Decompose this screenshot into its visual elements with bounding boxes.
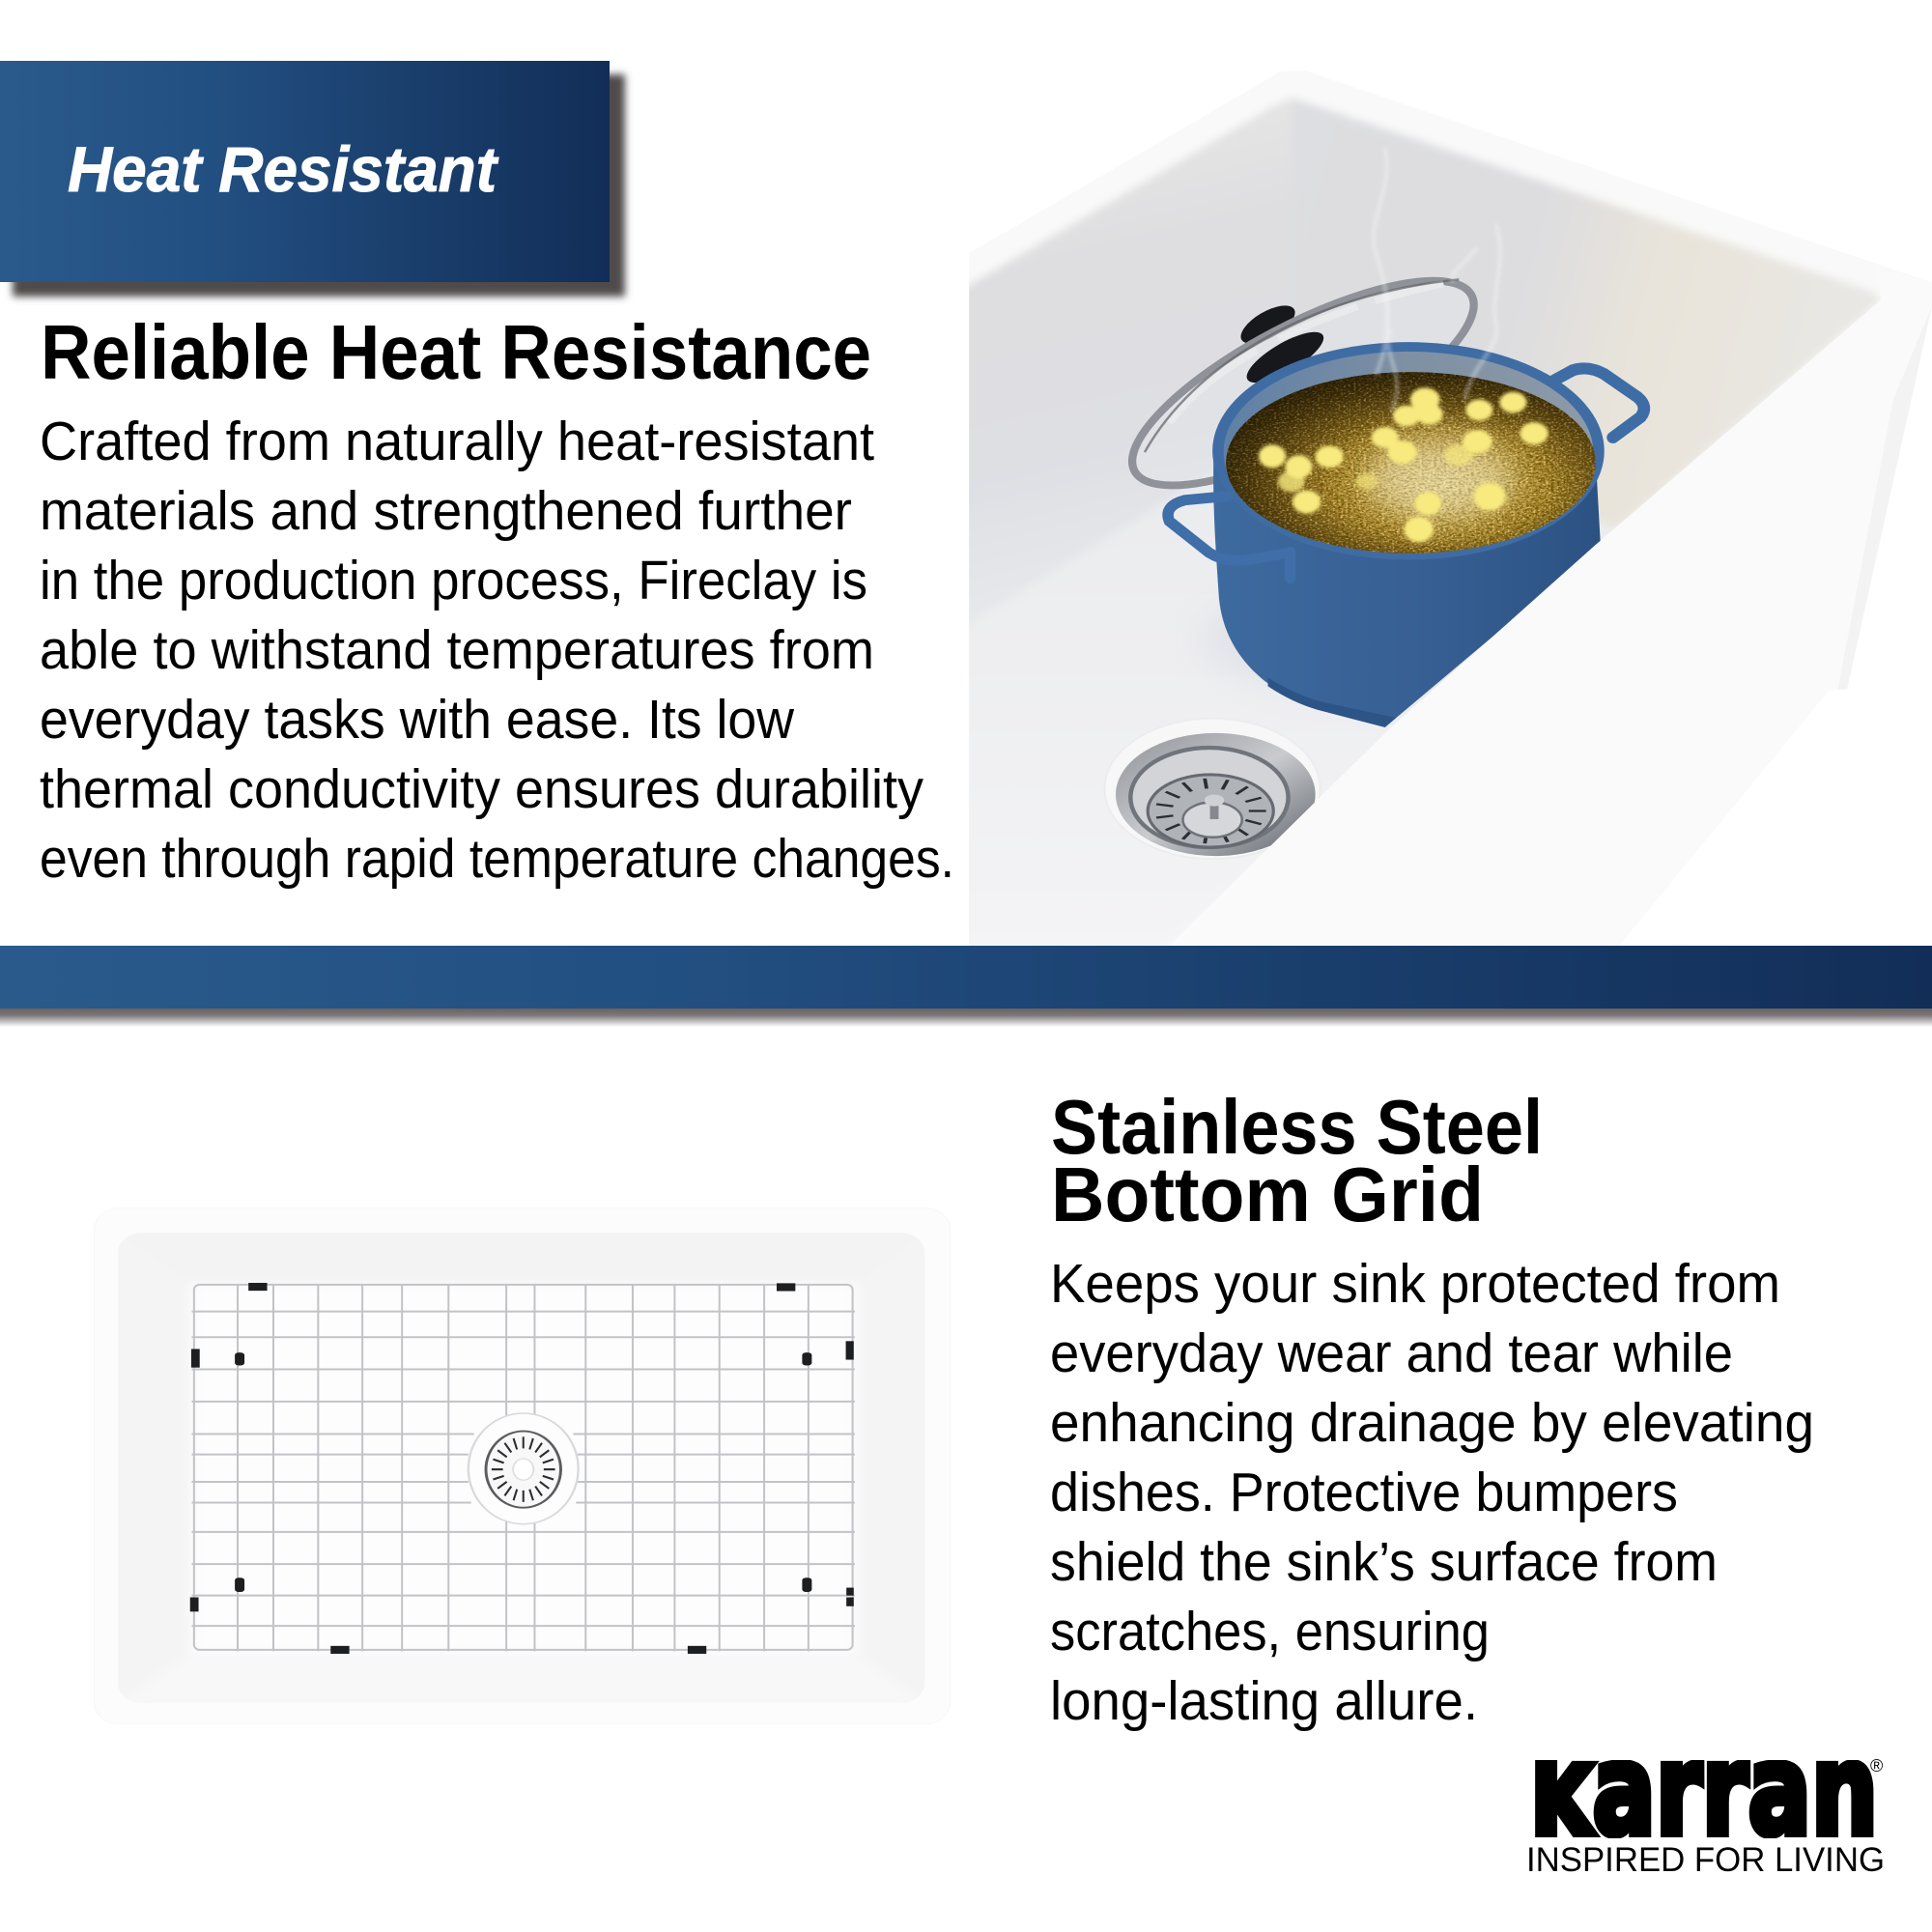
soft floor shading xyxy=(1215,624,1484,684)
text block: bottom grid description: enhancing drainage by elevating xyxy=(1050,1392,1814,1454)
heading: Stainless Steel Bottom Grid: Bottom Grid xyxy=(1051,1151,1484,1237)
heading: Stainless Steel Bottom Grid: Stainless Steel xyxy=(1051,1084,1543,1170)
sink outer rim xyxy=(969,71,1932,946)
sink front rim xyxy=(1265,303,1878,850)
boiling water with bubbles xyxy=(1225,370,1598,554)
steam xyxy=(1373,278,1492,413)
illustration: top view of sink with grid xyxy=(118,1233,924,1702)
center drain xyxy=(469,1413,579,1524)
glass pot lid xyxy=(1128,276,1478,489)
text block: bottom grid description: scratches, ensuring xyxy=(1050,1601,1490,1662)
text block: heat resistance description: materials and strengthened further xyxy=(40,480,852,542)
stainless steel grid xyxy=(192,1284,855,1651)
protective bumpers xyxy=(190,1283,854,1654)
text block: heat resistance description: able to withstand temperatures from xyxy=(40,619,874,681)
text block: heat resistance description: everyday tasks with ease. Its low xyxy=(40,689,795,751)
banner label: Heat Resistant xyxy=(68,133,499,205)
sink front side panel xyxy=(1837,306,1932,689)
pot rim and inner wall xyxy=(1212,342,1605,560)
text block: heat resistance description xyxy=(40,411,954,890)
heading: Stainless Steel Bottom Grid xyxy=(1051,1084,1543,1237)
text block: heat resistance description: thermal conductivity ensures durability xyxy=(40,758,923,820)
pot body xyxy=(1213,452,1601,727)
tagline: INSPIRED FOR LIVING xyxy=(1526,1841,1885,1879)
text block: bottom grid description: long-lasting allure. xyxy=(1050,1670,1478,1732)
heading: Reliable Heat Resistance: Reliable Heat Resistance xyxy=(41,309,871,395)
sink basin xyxy=(118,1233,924,1703)
text block: heat resistance description: Crafted from naturally heat-resistant xyxy=(40,411,874,472)
registered mark: ® xyxy=(1870,1756,1883,1776)
text block: bottom grid description: shield the sink’s surface from xyxy=(1050,1531,1718,1593)
text block: heat resistance description: even through rapid temperature changes. xyxy=(40,828,954,890)
drain flange and strainer xyxy=(1116,732,1316,856)
banner: Heat Resistant xyxy=(0,61,625,297)
right pot handle xyxy=(1551,368,1644,438)
basin sloped walls xyxy=(203,1289,846,1648)
illustration: fireclay sink with boiling pot xyxy=(953,71,1932,961)
logo: karran xyxy=(1529,1759,1883,1872)
sink rim xyxy=(95,1208,951,1724)
text block: heat resistance description: in the production process, Fireclay is xyxy=(40,550,867,611)
text block: bottom grid description: everyday wear and tear while xyxy=(1050,1322,1733,1384)
text block: bottom grid description: dishes. Protective bumpers xyxy=(1050,1462,1678,1523)
sink interior walls and floor xyxy=(969,98,1878,802)
divider band xyxy=(0,946,1932,1027)
text block: bottom grid description: Keeps your sink protected from xyxy=(1050,1253,1780,1315)
left pot handle xyxy=(1168,497,1290,578)
text block: bottom grid description xyxy=(1050,1253,1814,1732)
